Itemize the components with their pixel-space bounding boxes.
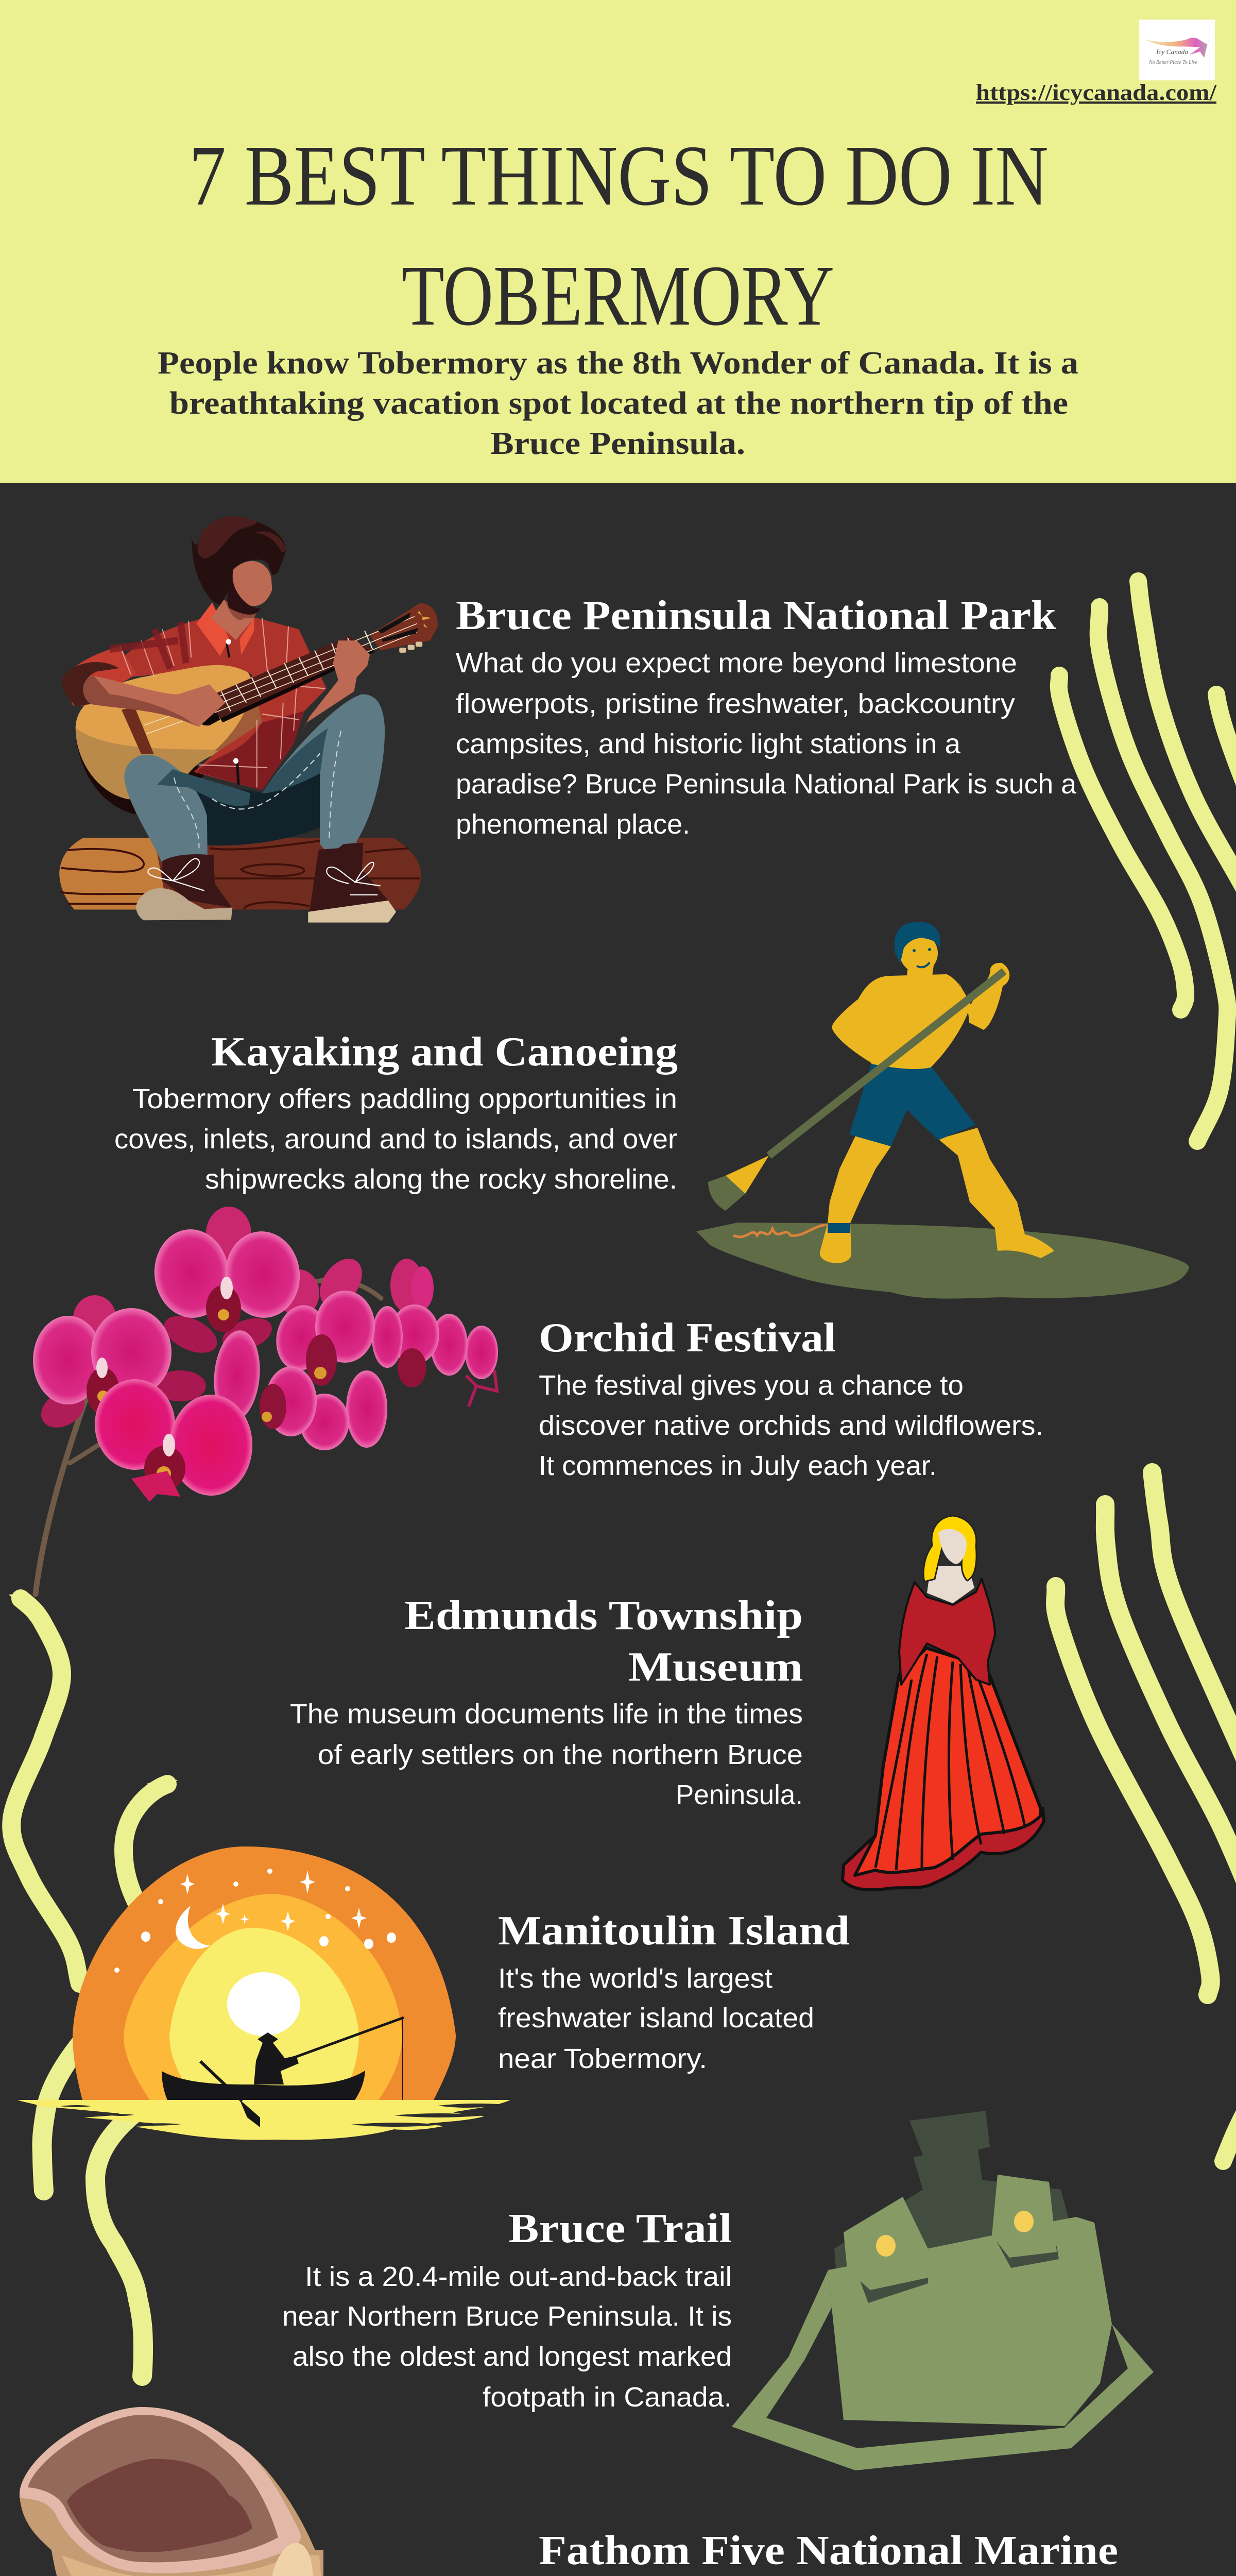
section: Orchid Festival text: Orchid Festival: [539, 1315, 836, 1361]
skirt: [855, 1648, 1041, 1875]
arms and hands: [62, 640, 370, 733]
guitar neck and headstock: [144, 603, 438, 734]
shell interior: [28, 2415, 278, 2562]
middle sun layer: [124, 1894, 402, 2100]
section: Edmunds Township Museum text: [290, 1593, 803, 1810]
pack body: [828, 2217, 1112, 2426]
section: Bruce Trail text: also the oldest and longest marked: [293, 2341, 732, 2372]
section: Kayaking and Canoeing text: Tobermory offers paddling opportunities in: [132, 1083, 677, 1114]
rivets: [876, 2211, 1034, 2257]
canoe and fisherman: [162, 2018, 404, 2127]
section: Manitoulin Island text: freshwater island located: [498, 2003, 814, 2033]
boots: [136, 842, 396, 923]
section: Edmunds Township Museum text: of early settlers on the northern Bruce: [318, 1739, 803, 1770]
section: Orchid Festival text: [539, 1315, 1043, 1481]
logo: [1139, 20, 1215, 80]
illustration: paddleboarder: [696, 922, 1189, 1299]
paddle blade: [708, 1156, 769, 1211]
illustration: woman in red Victorian dress: [843, 1516, 1044, 1890]
right pocket flap: [992, 2175, 1057, 2258]
intro text: Bruce Peninsula.: [490, 426, 745, 461]
section: Edmunds Township Museum text: The museum documents life in the times: [290, 1699, 803, 1730]
left pocket flap: [844, 2197, 928, 2290]
illustration: guitar player sitting on a log: [59, 516, 438, 923]
website link: https://icycanada.com/: [976, 80, 1217, 105]
leash: [733, 1225, 828, 1237]
stars: [114, 1869, 396, 1973]
neck and head: [211, 600, 257, 640]
title: TOBERMORY: [402, 248, 834, 344]
intro text: breathtaking vacation spot located at the northern tip of the: [169, 386, 1068, 421]
section: Bruce Peninsula National Park text: flowerpots, pristine freshwater, backcountry: [456, 688, 1015, 719]
board: [696, 1223, 1189, 1299]
section: Bruce Peninsula National Park text: What do you expect more beyond limestone: [456, 648, 1017, 679]
title: [189, 128, 1049, 344]
flower: middle: [210, 1291, 375, 1436]
shell lighter body: [62, 2555, 456, 2576]
section: Edmunds Township Museum text: Peninsula.: [676, 1780, 803, 1810]
outer orange sun: [73, 1846, 456, 2100]
white sun disc: [227, 1972, 300, 2036]
shell deep interior: [67, 2459, 252, 2552]
bodice and sleeves: [899, 1579, 995, 1685]
section: Manitoulin Island text: It's the world's largest: [498, 1963, 772, 1994]
shell whorl highlights: [265, 2540, 497, 2576]
illustration: conch seashell: [20, 2407, 510, 2576]
head and hair: [895, 922, 940, 980]
flower: top large: [151, 1226, 304, 1332]
section: Kayaking and Canoeing text: Kayaking and Canoeing: [211, 1029, 678, 1075]
section: Manitoulin Island text: Manitoulin Island: [498, 1908, 850, 1954]
logo: No Better Place To Live: [1148, 60, 1198, 65]
section: Bruce Trail text: [282, 2206, 732, 2413]
section: Orchid Festival text: It commences in July each year.: [539, 1450, 937, 1481]
top sepals: [35, 1207, 434, 1435]
stem: [36, 1280, 381, 1594]
section: Manitoulin Island text: [498, 1908, 850, 2074]
torso and arms: [832, 963, 1009, 1069]
section: Edmunds Township Museum text: Museum: [628, 1645, 803, 1690]
dark back of pack: [834, 2111, 1100, 2427]
section: Edmunds Township Museum text: Edmunds Township: [404, 1593, 803, 1638]
hem: [843, 1808, 1044, 1890]
inner sun layer: [169, 1928, 359, 2097]
right flap shadow: [995, 2239, 1059, 2268]
section: Bruce Peninsula National Park text: Bruce Peninsula National Park: [456, 593, 1057, 638]
shorts: [849, 1064, 975, 1146]
jeans: [124, 694, 385, 872]
section: Bruce Trail text: It is a 20.4-mile out-and-back trail: [305, 2261, 732, 2292]
paddle shaft: [769, 971, 1004, 1156]
section: Bruce Trail text: Bruce Trail: [508, 2206, 732, 2251]
legs: [820, 1128, 1054, 1263]
illustration: pink orchid branch: [33, 1207, 498, 1594]
decorative yellow seaweed squiggles: [9, 581, 1236, 2376]
flower: back cluster: [300, 1304, 498, 1450]
section: Bruce Peninsula National Park text: [456, 593, 1077, 840]
flower: left: [33, 1308, 171, 1415]
guitar body: [76, 656, 264, 815]
log: [59, 838, 421, 909]
section: Bruce Peninsula National Park text: campsites, and historic light stations in a: [456, 728, 961, 759]
section: Kayaking and Canoeing text: [114, 1029, 678, 1195]
crescent moon: [176, 1906, 210, 1949]
section: Kayaking and Canoeing text: shipwrecks along the rocky shoreline.: [205, 1164, 677, 1195]
flower: bottom large: [95, 1379, 252, 1502]
section: Bruce Trail text: near Northern Bruce Peninsula. It is: [282, 2301, 732, 2332]
section: Orchid Festival text: discover native orchids and wildflowers.: [539, 1410, 1043, 1441]
left flap shadow: [855, 2267, 928, 2303]
section: Bruce Trail text: footpath in Canada.: [483, 2382, 732, 2413]
plaid shirt: [62, 602, 327, 790]
water reflection: [18, 2100, 510, 2140]
shell outer body: [20, 2407, 510, 2576]
face: [938, 1529, 967, 1564]
head and hair: [192, 516, 286, 615]
illustration: sunset with fisherman in canoe: [18, 1846, 510, 2140]
straps: [732, 2270, 1154, 2470]
section: Bruce Peninsula National Park text: phenomenal place.: [456, 809, 690, 840]
intro text: People know Tobermory as the 8th Wonder of Canada. It is a: [158, 346, 1078, 381]
hair: [923, 1516, 976, 1582]
neck and chest: [927, 1566, 974, 1603]
illustration: green backpack: [732, 2111, 1154, 2470]
section: Orchid Festival text: The festival gives you a chance to: [539, 1370, 964, 1401]
logo: Icy Canada: [1156, 48, 1189, 56]
section: Manitoulin Island text: near Tobermory.: [498, 2043, 707, 2074]
skirt folds: [876, 1654, 1025, 1870]
title: 7 BEST THINGS TO DO IN: [189, 128, 1049, 224]
section: Bruce Peninsula National Park text: paradise? Bruce Peninsula National Park is such a: [456, 769, 1077, 800]
intro text: [158, 346, 1078, 461]
section: Fathom Five National Marine Park text: Fathom Five National Marine: [539, 2528, 1118, 2573]
shell rim: [20, 2407, 301, 2573]
ankle band: [828, 1223, 850, 1233]
header panel: [0, 0, 1236, 483]
section: Kayaking and Canoeing text: coves, inlets, around and to islands, and over: [114, 1124, 677, 1155]
